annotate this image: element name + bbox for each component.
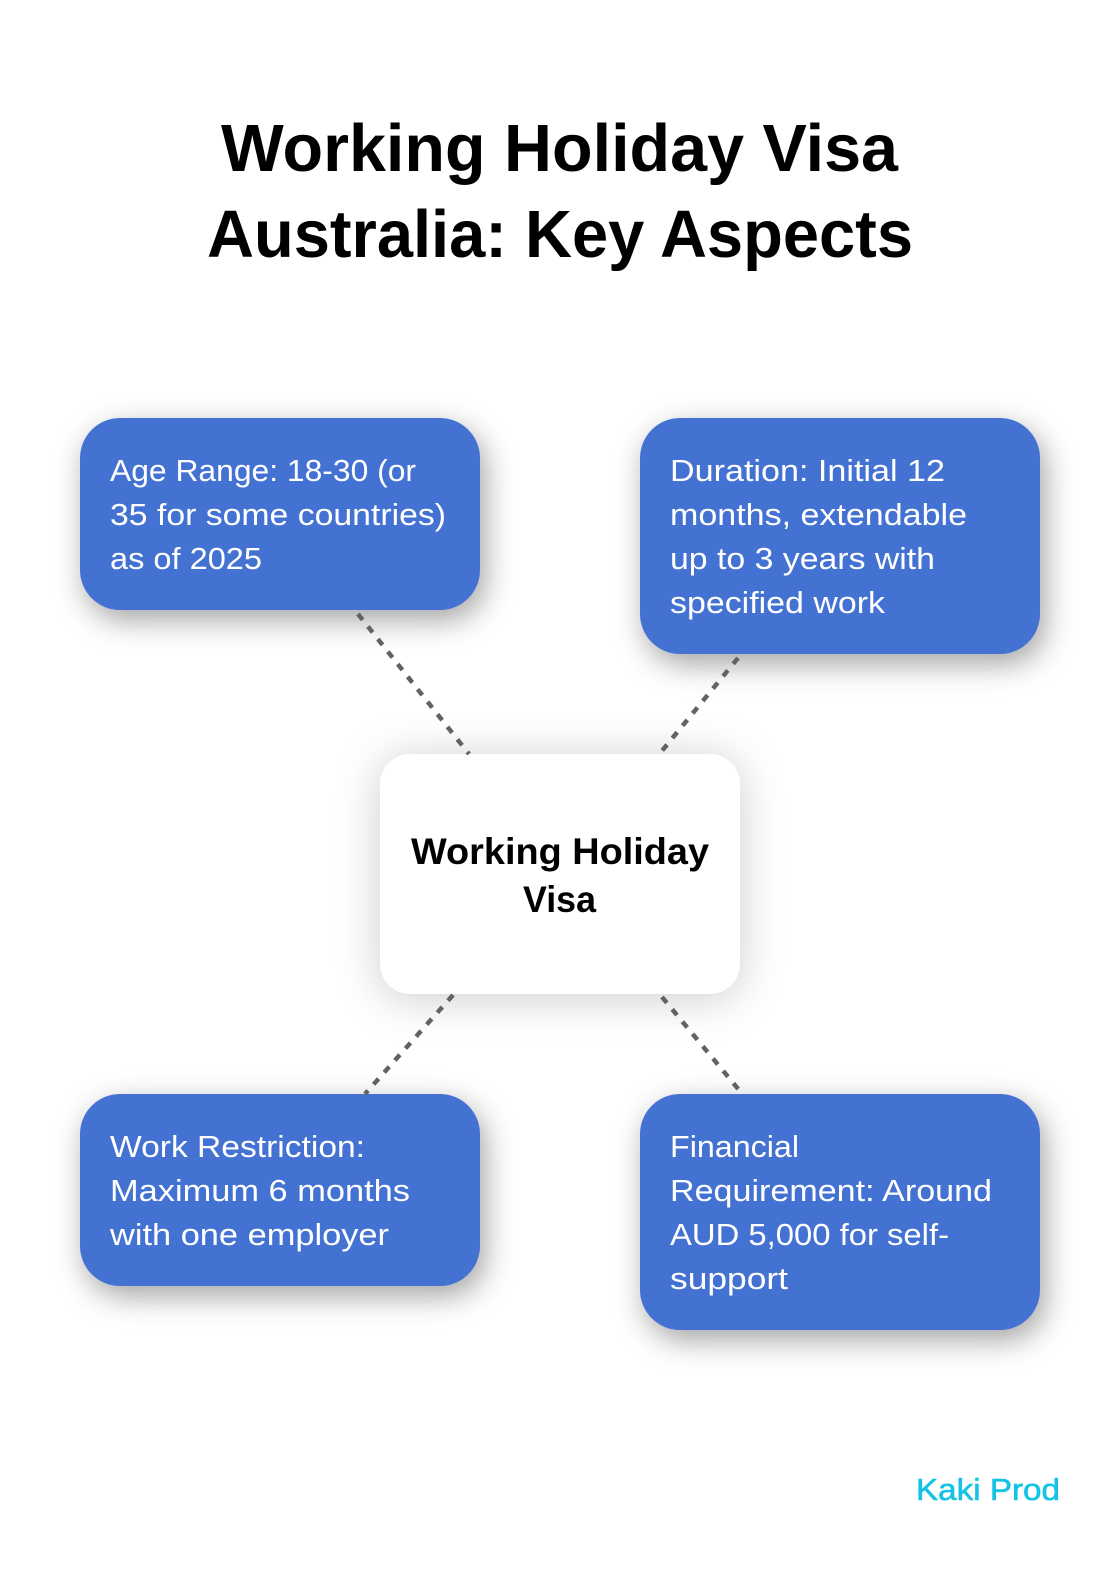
title: Australia: Key Aspects (207, 197, 913, 272)
panel: work restriction: Work Restriction: (110, 1129, 365, 1164)
panel: duration: Duration: Initial 12 (670, 453, 945, 488)
panel: duration (640, 418, 1040, 654)
panel: duration: specified work (670, 585, 886, 620)
panel: financial requirement: AUD 5,000 for self- (670, 1217, 949, 1252)
panel: financial requirement: Requirement: Around (670, 1173, 992, 1208)
connector: financial requirement to centre (662, 997, 739, 1090)
connector: duration to centre (661, 658, 738, 752)
connector: work restriction to centre (365, 995, 453, 1094)
panel: work restriction (80, 1094, 480, 1286)
panel: duration: months, extendable (670, 497, 967, 532)
panel: financial requirement: Financial (670, 1129, 799, 1164)
title (207, 111, 913, 272)
logo: Kaki Prod: Kaki Prod (916, 1472, 1060, 1507)
connector: age range to centre (358, 614, 469, 754)
panel: financial requirement (640, 1094, 1040, 1330)
panel: central node: Working Holiday (411, 831, 709, 872)
panel: central node: Visa (523, 879, 596, 920)
panel: financial requirement: support (670, 1261, 788, 1296)
panel: age range: Age Range: 18-30 (or (110, 453, 416, 488)
panel: work restriction: Maximum 6 months (110, 1173, 410, 1208)
panel: age range: as of 2025 (110, 541, 262, 576)
panel: age range: 35 for some countries) (110, 497, 446, 532)
panel: central node (380, 754, 740, 994)
title: Working Holiday Visa (221, 111, 899, 186)
panel: age range (80, 418, 480, 610)
panel: duration: up to 3 years with (670, 541, 935, 576)
panel: work restriction: with one employer (109, 1217, 389, 1252)
